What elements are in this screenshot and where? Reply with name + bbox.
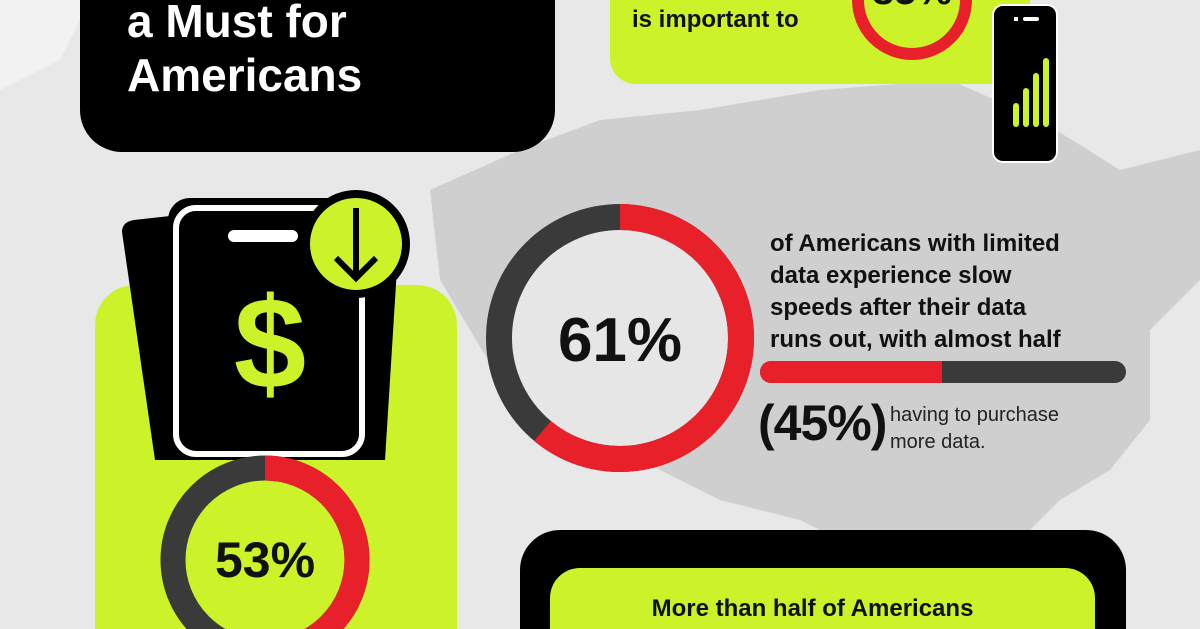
stat 45%: (45%) <box>758 395 886 451</box>
donut 61%: 61% <box>558 306 682 375</box>
callout text: More than half of Americans <box>652 595 973 622</box>
text block 61%: speeds after their data <box>770 294 1026 321</box>
text 45%: having to purchase <box>890 404 1059 426</box>
text 45% <box>890 404 1059 453</box>
text block 61%: runs out, with almost half <box>770 326 1061 353</box>
inner lime <box>550 568 1095 629</box>
ring 85% <box>852 0 972 60</box>
text block 61% <box>770 230 1061 353</box>
text: is important to <box>632 6 799 33</box>
icon: phone with signal <box>992 4 1058 163</box>
panel: left lime <box>95 285 457 629</box>
panel: connection importance <box>610 0 1030 84</box>
title text: Americans <box>127 49 362 101</box>
donut 53% <box>160 456 370 629</box>
text 45%: more data. <box>890 431 986 453</box>
icon: phone with dollar <box>122 190 410 460</box>
panel: bottom callout <box>520 530 1126 629</box>
donut 53%: 53% <box>215 532 315 588</box>
title box <box>80 0 555 152</box>
text block 61%: of Americans with limited <box>770 230 1060 257</box>
icon: phone with dollar: $ <box>234 270 306 416</box>
text block 61%: data experience slow <box>770 262 1011 289</box>
bar 45% <box>760 361 1126 383</box>
title text <box>127 0 362 101</box>
donut 61% <box>486 204 754 472</box>
